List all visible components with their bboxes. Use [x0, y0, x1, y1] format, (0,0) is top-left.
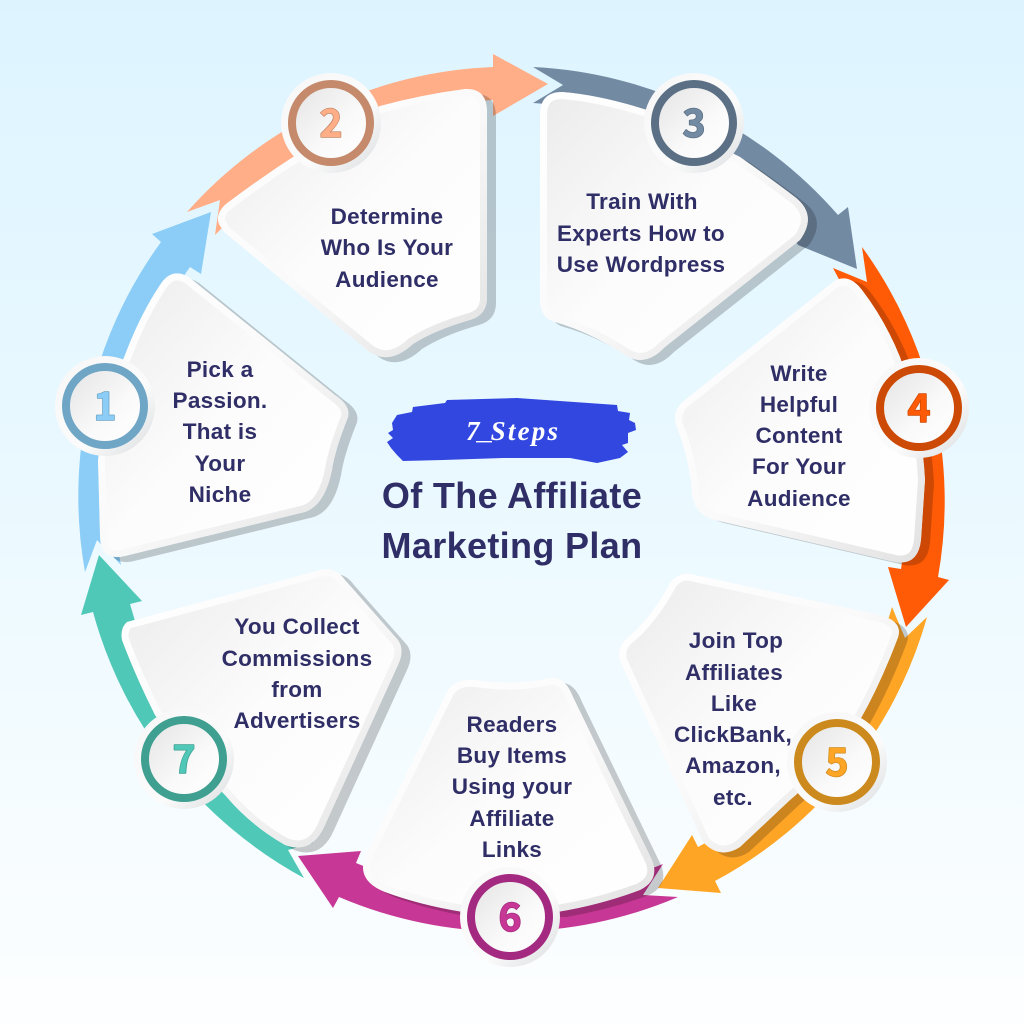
number badge 3	[644, 73, 744, 173]
text: step 6: Affiliate	[469, 806, 555, 831]
number badge 2: 2	[319, 93, 343, 149]
number badge 5: 5	[825, 732, 849, 788]
number badge 5	[787, 712, 887, 812]
text: step 1: Pick a	[187, 357, 254, 382]
card shape 7	[122, 569, 411, 852]
card shape 4	[675, 278, 934, 566]
text: step 6: Using your	[452, 774, 572, 799]
number badge 7	[134, 709, 234, 809]
panel: step 2 card	[218, 89, 496, 362]
card shape 3	[540, 92, 817, 365]
number badge 6	[460, 867, 560, 967]
text: step 3: Use Wordpress	[557, 252, 725, 277]
text: step 5: Affiliates	[685, 660, 783, 685]
text: step 6: Readers	[467, 712, 557, 737]
text: step 7: from	[271, 677, 323, 702]
text: step 6: Buy Items	[457, 743, 567, 768]
text: step 2: Audience	[335, 267, 439, 292]
text: step 5: Like	[711, 691, 757, 716]
text: step 2: Who Is Your	[321, 235, 453, 260]
text: step 3: Experts How to	[557, 221, 725, 246]
number badge 4: 4	[907, 378, 931, 434]
text: step 2: Determine	[331, 204, 443, 229]
arrow: step 5 amber	[658, 607, 927, 893]
arrow: step 2 peach	[187, 54, 548, 235]
text: step 1: That is	[183, 419, 257, 444]
text: step 4: Helpful	[760, 392, 838, 417]
arrow: step 4 orange-red	[833, 247, 949, 627]
panel: step 3 card	[540, 92, 817, 365]
title: Of The Affiliate	[382, 475, 642, 516]
text: step 1: Passion.	[173, 388, 267, 413]
card shape 2	[218, 89, 496, 362]
number badge 3: 3	[682, 93, 706, 149]
text: step 4: For Your	[752, 454, 846, 479]
circular arrow ring	[78, 54, 949, 932]
text: step 7: Commissions	[222, 646, 372, 671]
number badge 6: 6	[498, 887, 522, 943]
arrow: step 7 teal	[81, 555, 313, 878]
panel: step 5 card	[619, 574, 908, 857]
text: step 7: You Collect	[234, 614, 360, 639]
number badge 4	[869, 358, 969, 458]
text: step 5: Amazon,	[685, 753, 781, 778]
title	[382, 475, 642, 566]
arrow: step 1 blue	[78, 212, 211, 572]
arrow: step 6 magenta	[298, 851, 678, 932]
number badge 1: 1	[93, 376, 117, 432]
text: step 7: Advertisers	[233, 708, 361, 733]
text: step 1: Niche	[189, 482, 251, 507]
text: step 6: Links	[482, 837, 542, 862]
center brush banner: 7 Steps	[466, 416, 558, 446]
number badge 1	[55, 356, 155, 456]
arrow: step 3 slate	[533, 67, 857, 269]
text: step 1: Your	[195, 451, 245, 476]
panel: step 7 card	[122, 569, 411, 852]
panel: step 1 card	[98, 273, 358, 562]
text: step 5: Join Top	[689, 628, 783, 653]
text: step 4: Audience	[747, 486, 851, 511]
text: step 4: Write	[770, 361, 828, 386]
text: step 4: Content	[755, 423, 843, 448]
card shape 1	[98, 273, 358, 562]
text: step 5: ClickBank,	[674, 722, 792, 747]
text: step 3: Train With	[586, 189, 698, 214]
text: step 5: etc.	[713, 785, 753, 810]
card shape 6	[363, 678, 663, 917]
card shape 5	[619, 574, 908, 857]
number badge 7: 7	[172, 729, 196, 785]
panel: step 4 card	[675, 278, 934, 566]
number badge 2	[281, 73, 381, 173]
panel: step 6 card	[363, 678, 663, 917]
title: Marketing Plan	[382, 525, 642, 566]
center brush banner	[387, 398, 636, 463]
